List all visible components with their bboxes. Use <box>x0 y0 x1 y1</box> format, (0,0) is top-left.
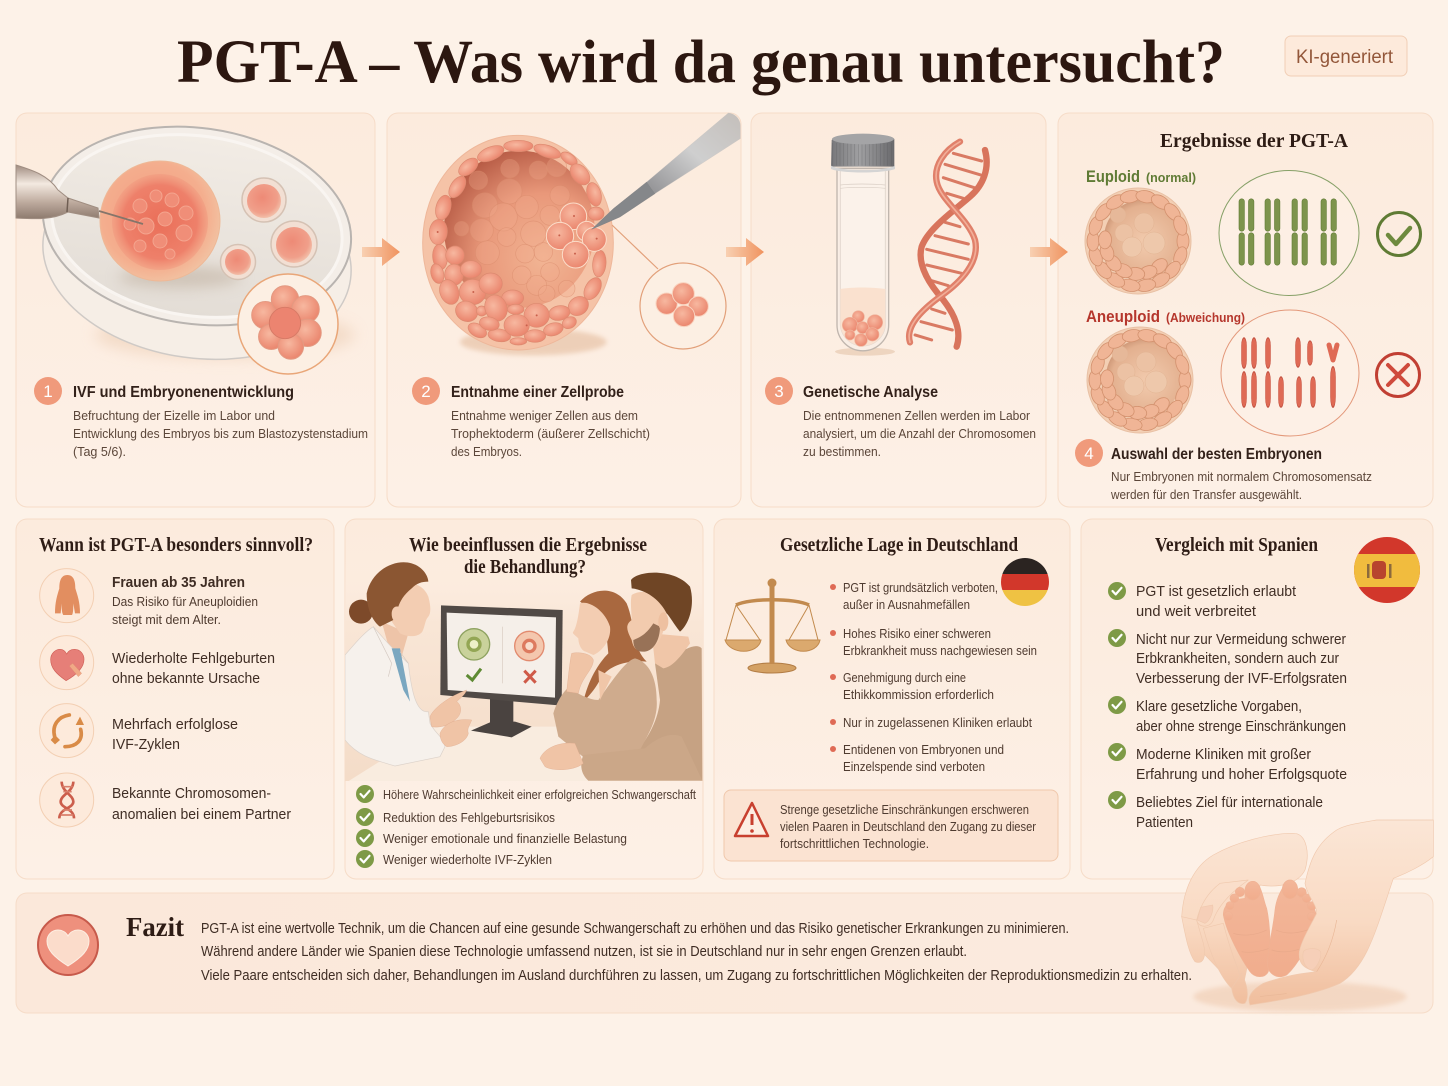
callout: warning: vielen Paaren in Deutschland den Zugang zu dieser <box>780 820 1036 834</box>
panel: Spain <box>1081 519 1433 879</box>
panel: step 2 biopsy <box>387 113 741 507</box>
text step 4: werden für den Transfer ausgewählt. <box>1110 487 1302 502</box>
list: legal rules: außer in Ausnahmefällen <box>843 598 970 612</box>
heading impact: Wie beeinflussen die Ergebnisse <box>409 534 647 556</box>
panel: conclusion <box>16 893 1433 1013</box>
callout: warning: fortschrittlichen Technologie. <box>780 837 929 851</box>
item: failed cycles: Mehrfach erfolglose <box>112 716 238 733</box>
list: Spain facts: Patienten <box>1136 814 1193 831</box>
item: age: steigt mit dem Alter. <box>112 613 221 627</box>
step number 2: 2 <box>421 382 431 401</box>
text step 3: Die entnommenen Zellen werden im Labor <box>803 408 1031 423</box>
icon: German flag <box>1001 558 1049 606</box>
panel: Germany <box>714 519 1070 879</box>
list: legal rules: Genehmigung durch eine <box>843 671 966 685</box>
list: legal rules: Einzelspende sind verboten <box>843 760 985 774</box>
list: legal rules: PGT ist grundsätzlich verboten, <box>843 581 998 595</box>
panel: step 1 IVF <box>16 107 375 507</box>
heading results: Ergebnisse der PGT-A <box>1160 130 1349 152</box>
label euploid: Euploid <box>1086 167 1140 186</box>
icon: woman <box>40 569 94 623</box>
chromosomes abnormal <box>1221 310 1359 436</box>
text conclusion <box>201 921 1192 984</box>
item: failed cycles: IVF-Zyklen <box>112 736 180 753</box>
icon: heart <box>38 915 98 975</box>
callout: warning <box>724 790 1058 861</box>
man torso <box>582 646 702 781</box>
item: miscarriages <box>112 650 275 687</box>
heading when useful: Wann ist PGT-A besonders sinnvoll? <box>39 534 313 556</box>
zoom circle: morula <box>238 274 338 374</box>
list: legal rules: Ethikkommission erforderlich <box>843 688 994 702</box>
inner cells <box>454 157 575 302</box>
right foot <box>1267 880 1317 977</box>
text conclusion: Viele Paare entscheiden sich daher, Behandlungen im Ausland durchführen zu lassen, um Zugang zu fortschrittlichen Möglichkeiten der Reproduktionsmedizin zu erhalten. <box>201 968 1192 984</box>
text step 3: analysiert, um die Anzahl der Chromosomen <box>803 426 1036 441</box>
icon: cycle arrows <box>40 704 94 758</box>
list: legal rules: Hohes Risiko einer schweren <box>843 627 991 641</box>
list: legal rules: Erbkrankheit muss nachgewiesen sein <box>843 644 1037 658</box>
heading Spain: Vergleich mit Spanien <box>1155 534 1318 556</box>
list: legal rules <box>830 581 1037 774</box>
text step 2: Trophektoderm (äußerer Zellschicht) <box>451 426 650 441</box>
left hand <box>1182 833 1307 1004</box>
icon: cross <box>1376 354 1420 396</box>
illustration: blastocyst <box>423 135 613 355</box>
heading Germany: Gesetzliche Lage in Deutschland <box>780 534 1018 556</box>
panel: treatment impact <box>345 519 705 879</box>
label euploid: (normal) <box>1146 170 1196 185</box>
text conclusion: PGT-A ist eine wertvolle Technik, um die Chancen auf eine gesunde Schwangerschaft zu erhöhen und das Risiko genetischer Erkrankungen zu minimieren. <box>201 921 1069 937</box>
title: PGT-A – Was wird da genau untersucht? <box>177 29 1225 96</box>
item: age <box>112 574 258 627</box>
text step 4: Nur Embryonen mit normalem Chromosomensatz <box>1111 469 1372 484</box>
item: chromosome anomalies: anomalien bei einem Partner <box>112 806 291 823</box>
step number 4 <box>1075 439 1103 467</box>
list: Spain facts: Beliebtes Ziel für internationale <box>1136 794 1323 811</box>
step number 1: 1 <box>43 382 53 401</box>
small embryos <box>220 178 317 280</box>
item: miscarriages: ohne bekannte Ursache <box>112 670 260 687</box>
table <box>345 727 705 783</box>
text step 1 <box>73 408 368 459</box>
step number 3 <box>765 377 793 405</box>
list: benefits: Höhere Wahrscheinlichkeit einer erfolgreichen Schwangerschaft <box>383 788 696 802</box>
step number 4: 4 <box>1084 444 1094 463</box>
list: Spain facts: Verbesserung der IVF-Erfolgsraten <box>1136 670 1347 687</box>
icon: DNA <box>40 773 94 827</box>
list: benefits: Weniger emotionale und finanzielle Belastung <box>383 832 627 846</box>
heading step 4: Auswahl der besten Embryonen <box>1111 446 1322 463</box>
item: chromosome anomalies: Bekannte Chromosomen- <box>112 785 271 802</box>
arrow 2 <box>726 238 764 266</box>
illustration: hands holding baby feet <box>1182 820 1433 1012</box>
list: Spain facts: Nicht nur zur Vermeidung schwerer <box>1136 631 1346 648</box>
item: miscarriages: Wiederholte Fehlgeburten <box>112 650 275 667</box>
label aneuploid <box>1086 307 1245 326</box>
item: age: Frauen ab 35 Jahren <box>112 574 245 591</box>
chromosomes normal <box>1219 170 1359 296</box>
biopsy pipette <box>592 113 740 229</box>
text step 1: Entwicklung des Embryos bis zum Blastozystenstadium <box>73 426 368 441</box>
panel: step 3 analysis <box>751 113 1046 507</box>
heading impact: die Behandlung? <box>464 556 586 578</box>
illustration: test tube <box>831 134 895 356</box>
text conclusion: Während andere Länder wie Spanien diese Technologie umfassend nutzen, ist sie in Deutschland nur in sehr engen Grenzen erlaubt. <box>201 944 967 960</box>
heading step 2: Entnahme einer Zellprobe <box>451 384 624 401</box>
text step 4 <box>1110 469 1372 502</box>
illustration: DNA helix <box>909 142 987 347</box>
illustration: petri dish with embryos <box>16 107 364 379</box>
label aneuploid: Aneuploid <box>1086 307 1160 326</box>
step number 3: 3 <box>774 382 784 401</box>
list: Spain facts: Klare gesetzliche Vorgaben, <box>1136 698 1302 715</box>
pipette <box>16 165 143 224</box>
badge: KI-generiert <box>1285 36 1407 76</box>
list: benefits <box>356 785 696 868</box>
list: Spain facts: und weit verbreitet <box>1136 603 1257 620</box>
item: failed cycles <box>112 716 238 753</box>
couple hands and arm <box>540 743 702 781</box>
icon: check <box>1378 212 1420 256</box>
heading step 1: IVF und Embryonenentwicklung <box>73 384 294 401</box>
text step 3: zu bestimmen. <box>803 444 881 459</box>
embryo euploid <box>1085 188 1191 294</box>
text step 3 <box>803 408 1036 459</box>
monitor <box>440 605 563 737</box>
text step 2: des Embryos. <box>451 444 522 459</box>
icon: heart with bandage <box>40 636 94 690</box>
heading step 3: Genetische Analyse <box>803 384 938 401</box>
panel: when useful <box>16 519 334 879</box>
icon: Spanish flag <box>1354 537 1420 603</box>
list: Spain facts: PGT ist gesetzlich erlaubt <box>1136 583 1297 600</box>
step number 1 <box>34 377 62 405</box>
icon: warning triangle <box>735 803 768 836</box>
list: benefits: Weniger wiederholte IVF-Zyklen <box>383 853 552 867</box>
panel: results <box>1058 113 1433 507</box>
arrow 3 <box>1030 238 1068 266</box>
list: benefits: Reduktion des Fehlgeburtsrisikos <box>383 811 555 825</box>
icon: scales <box>725 579 820 673</box>
text step 2 <box>451 408 650 459</box>
list: Spain facts <box>1108 582 1347 831</box>
text step 2: Entnahme weniger Zellen aus dem <box>451 408 638 423</box>
label aneuploid: (Abweichung) <box>1166 310 1245 325</box>
illustration: consultation scene <box>345 556 705 783</box>
text step 1: Befruchtung der Eizelle im Labor und <box>73 408 275 423</box>
list: Spain facts: Erfahrung und hoher Erfolgsquote <box>1136 766 1347 783</box>
heading conclusion: Fazit <box>126 912 184 942</box>
big embryo <box>100 161 220 281</box>
rim cells <box>428 140 607 345</box>
right hand <box>1249 820 1433 1005</box>
step number 2 <box>412 377 440 405</box>
list: legal rules: Entidenen von Embryonen und <box>843 743 1004 757</box>
extracted cells <box>546 203 606 268</box>
heading impact <box>409 534 647 578</box>
woman <box>553 591 657 758</box>
badge: KI-generiert: KI-generiert <box>1296 47 1394 68</box>
zoom callout: biopsied cells <box>612 225 726 349</box>
doctor <box>345 562 472 766</box>
left foot <box>1223 881 1270 977</box>
list: Spain facts: Moderne Kliniken mit großer <box>1136 746 1311 763</box>
label euploid <box>1086 167 1196 186</box>
list: Spain facts: aber ohne strenge Einschränkungen <box>1136 718 1346 735</box>
item: age: Das Risiko für Aneuploidien <box>112 595 258 609</box>
list: legal rules: Nur in zugelassenen Kliniken erlaubt <box>843 716 1032 730</box>
arrow 1 <box>362 238 400 266</box>
embryo aneuploid <box>1087 327 1193 433</box>
list: Spain facts: Erbkrankheiten, sondern auch zur <box>1136 650 1339 667</box>
man head <box>627 573 692 668</box>
item: chromosome anomalies <box>112 785 291 823</box>
text step 1: (Tag 5/6). <box>73 444 126 459</box>
callout: warning: Strenge gesetzliche Einschränkungen erschweren <box>780 803 1029 817</box>
